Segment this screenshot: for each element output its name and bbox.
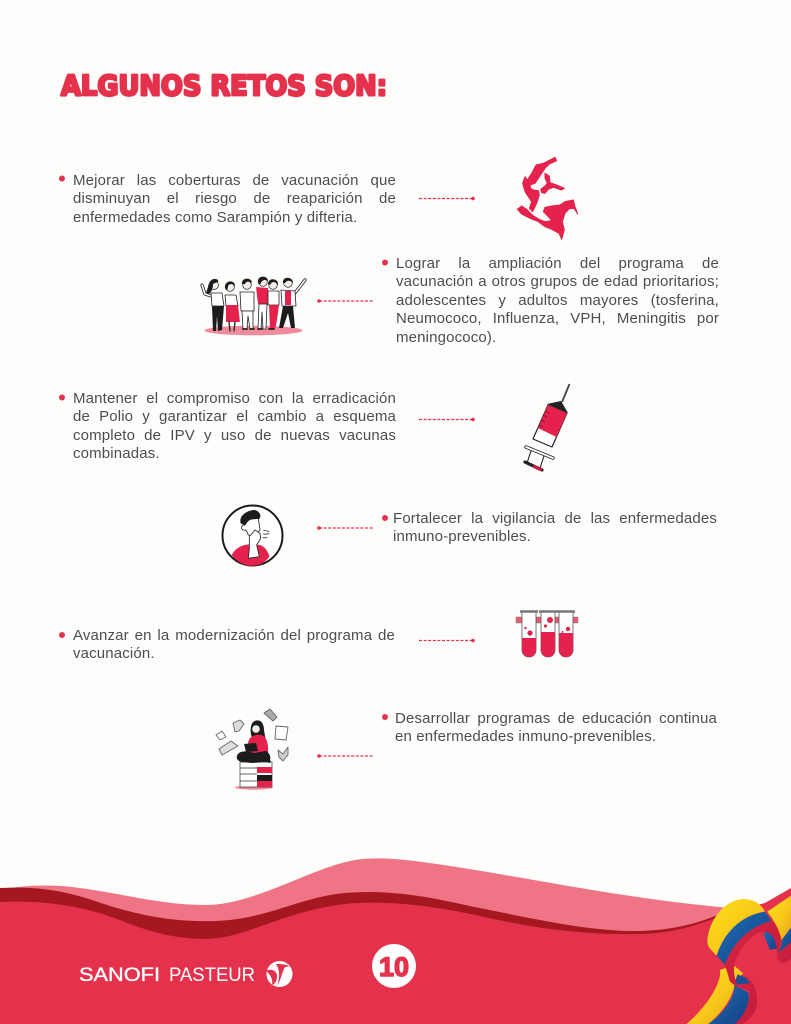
book stack: [240, 762, 272, 787]
bullet 5: [59, 632, 65, 638]
footer wave: red base: [0, 888, 791, 1024]
text block 2: meningococo).: [396, 329, 496, 346]
connector 5: [419, 639, 475, 642]
text block 3: combinadas.: [73, 445, 160, 462]
woman: [237, 720, 271, 763]
bullet 2: [382, 260, 388, 266]
connector 2: [317, 299, 373, 303]
icon: Colombia map: [517, 157, 578, 239]
text block 4: [393, 510, 717, 545]
connector 6: [317, 754, 373, 758]
shadow: [235, 785, 273, 790]
connector 4: [317, 526, 373, 530]
floating books: [216, 709, 288, 761]
text block 1: disminuyan el riesgo de reaparición de: [73, 190, 396, 207]
icon: person sneezing: [222, 506, 282, 566]
connector 1: [419, 197, 475, 200]
logo mark: [266, 961, 293, 987]
connector 3: [419, 418, 475, 421]
text block 1: enfermedades como Sarampión y difteria.: [73, 209, 357, 226]
page number: [372, 944, 416, 988]
text block 3: [73, 390, 396, 462]
person 1: [202, 279, 224, 331]
flag ribbon: [687, 888, 791, 1024]
text block 5: vacunación.: [73, 645, 155, 662]
text block 6: en enfermedades inmuno-prevenibles.: [395, 728, 656, 745]
bullet 1: [59, 176, 65, 182]
lower ribbon: [687, 965, 757, 1024]
text block 2: [396, 255, 719, 346]
footer wave: pink layer: [0, 858, 791, 1024]
text block 5: Avanzar en la modernización del programa de: [73, 627, 395, 644]
footer wave: dark layer: [0, 888, 791, 1024]
text block 3: Mantener el compromiso con la erradicación: [73, 390, 396, 407]
ground shadow: [204, 326, 302, 335]
text block 4: Fortalecer la vigilancia de las enfermedades: [393, 510, 717, 527]
text block 2: vacunación a otros grupos de edad prioritarios;: [396, 273, 719, 290]
right ribbon end: [762, 888, 791, 963]
bullet 3: [59, 394, 65, 400]
bullet 4: [382, 515, 388, 521]
text block 1: [73, 172, 396, 226]
icon: group of people: [202, 277, 305, 335]
person 3: [240, 279, 254, 329]
person 6: [279, 278, 305, 328]
upper ribbon loop: [707, 899, 781, 988]
page number: 10: [379, 952, 409, 982]
text block 2: adolescentes y adultos mayores (tosferina,: [396, 292, 719, 309]
text block 3: completo de IPV y uso de nuevas vacunas: [73, 427, 396, 444]
bullet 6: [382, 714, 388, 720]
text block 5: [73, 627, 395, 662]
logo: Sanofi Pasteur: PASTEUR: [169, 964, 255, 986]
text block 4: inmuno-prevenibles.: [393, 528, 531, 545]
text block 2: Neumococo, Influenza, VPH, Meningitis por: [396, 310, 719, 327]
title: ALGUNOS RETOS SON:: [61, 69, 387, 102]
icon: test tubes: [516, 612, 578, 657]
text block 6: Desarrollar programas de educación continua: [395, 710, 717, 727]
text block 1: Mejorar las coberturas de vacunación que: [73, 172, 396, 189]
text block 3: de Polio y garantizar el cambio a esquema: [73, 408, 396, 425]
logo: Sanofi Pasteur: SANOFI: [79, 964, 160, 986]
person 4: [256, 277, 268, 329]
logo: Sanofi Pasteur: [79, 961, 293, 987]
text block 6: [395, 710, 717, 745]
person 5: [268, 279, 279, 329]
person 2: [225, 281, 240, 331]
text block 2: Lograr la ampliación del programa de: [396, 255, 719, 272]
icon: syringe: [525, 384, 570, 470]
icon: student reading on books: [216, 709, 288, 790]
